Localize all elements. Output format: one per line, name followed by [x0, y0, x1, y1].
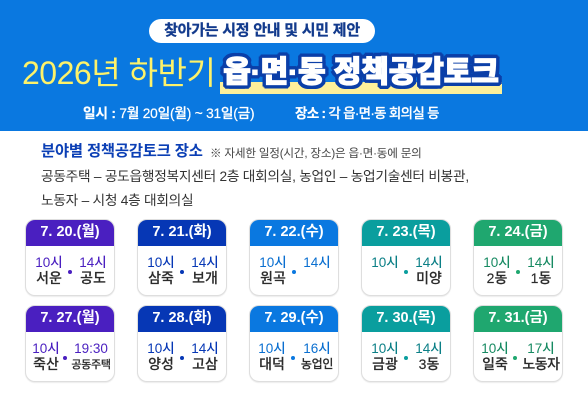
- card 7.23: [361, 219, 451, 296]
- date info: 일시 : 7월 20일(월) ~ 31일(금): [83, 106, 254, 121]
- card 7.29: 대덕: [259, 356, 285, 372]
- card 7.31: 7. 31.(금): [488, 310, 548, 326]
- card 7.27: 10시: [32, 341, 60, 356]
- card 7.30: 10시: [371, 341, 399, 356]
- card 7.29: 7. 29.(수): [264, 310, 324, 326]
- card 7.24: 10시: [483, 255, 511, 270]
- card 7.31: 노동자: [522, 356, 560, 372]
- card 7.22: 원곡: [260, 270, 286, 286]
- card 7.21: 10시: [147, 255, 175, 270]
- card 7.30: [361, 305, 451, 382]
- card 7.22: [249, 219, 339, 296]
- card 7.30: 7. 30.(목): [376, 310, 436, 326]
- venue info: 장소 : 각 읍·면·동 회의실 등: [295, 106, 439, 121]
- card 7.21: [137, 219, 227, 296]
- card 7.31: [473, 305, 563, 382]
- card 7.24: 1동: [531, 270, 551, 286]
- card 7.21: 보개: [192, 270, 218, 286]
- card 7.24: 2동: [487, 270, 507, 286]
- venue text line 2: 노동자 – 시청 4층 대회의실: [41, 193, 193, 208]
- card 7.27: 죽산: [33, 356, 59, 372]
- card 7.28: 양성: [148, 356, 174, 372]
- card 7.31: 17시: [527, 341, 555, 356]
- card 7.28: 고삼: [192, 356, 218, 372]
- card 7.29: [249, 305, 339, 382]
- card 7.27: 공동주택: [71, 359, 111, 371]
- card 7.22: 7. 22.(수): [264, 224, 324, 240]
- card 7.20: 10시: [35, 255, 63, 270]
- subtitle pill: 찾아가는 시정 안내 및 시민 제안: [164, 22, 360, 39]
- card 7.27: 19:30: [74, 341, 108, 356]
- card 7.29: 농업인: [301, 357, 333, 371]
- card 7.31: 일죽: [482, 356, 508, 372]
- card 7.20: [25, 219, 115, 296]
- card 7.27: 7. 27.(월): [40, 310, 100, 326]
- section heading: 분야별 정책공감토크 장소: [41, 143, 203, 160]
- card 7.23: 7. 23.(목): [376, 224, 436, 240]
- card 7.23: 미양: [416, 270, 442, 286]
- card 7.30: 14시: [415, 341, 443, 356]
- card 7.22: 14시: [303, 255, 331, 270]
- card 7.23: 14시: [415, 255, 443, 270]
- card 7.30: 3동: [419, 356, 439, 372]
- card 7.21: 삼죽: [148, 270, 174, 286]
- title highlight bar: [220, 82, 502, 94]
- header banner: [0, 0, 588, 131]
- card 7.24: 14시: [527, 255, 555, 270]
- card 7.28: 7. 28.(화): [152, 310, 212, 326]
- note: ※ 자세한 일정(시간, 장소)은 읍·면·동에 문의: [210, 147, 422, 160]
- card 7.28: 10시: [147, 341, 175, 356]
- venue text line 1: 공동주택 – 공도읍행정복지센터 2층 대회의실, 농업인 – 농업기술센터 비봉관,: [41, 169, 469, 184]
- card 7.20: 서운: [36, 270, 62, 286]
- card 7.27: [25, 305, 115, 382]
- card 7.20: 공도: [80, 270, 106, 286]
- card 7.28: 14시: [191, 341, 219, 356]
- card 7.20: 14시: [79, 255, 107, 270]
- card 7.29: 16시: [303, 341, 331, 356]
- card 7.23: 10시: [371, 255, 399, 270]
- card 7.29: 10시: [258, 341, 286, 356]
- card 7.28: [137, 305, 227, 382]
- card 7.21: 7. 21.(화): [152, 224, 212, 240]
- card 7.21: 14시: [191, 255, 219, 270]
- card 7.30: 금광: [372, 356, 398, 372]
- card 7.24: [473, 219, 563, 296]
- card 7.24: 7. 24.(금): [488, 224, 548, 240]
- card 7.20: 7. 20.(월): [40, 224, 100, 240]
- card 7.22: 10시: [259, 255, 287, 270]
- title: year and half: 2026년 하반기: [22, 55, 215, 91]
- card 7.31: 10시: [481, 341, 509, 356]
- title: emphasized: 읍·면·동 정책공감토크: [223, 56, 499, 89]
- subtitle pill: [149, 19, 375, 43]
